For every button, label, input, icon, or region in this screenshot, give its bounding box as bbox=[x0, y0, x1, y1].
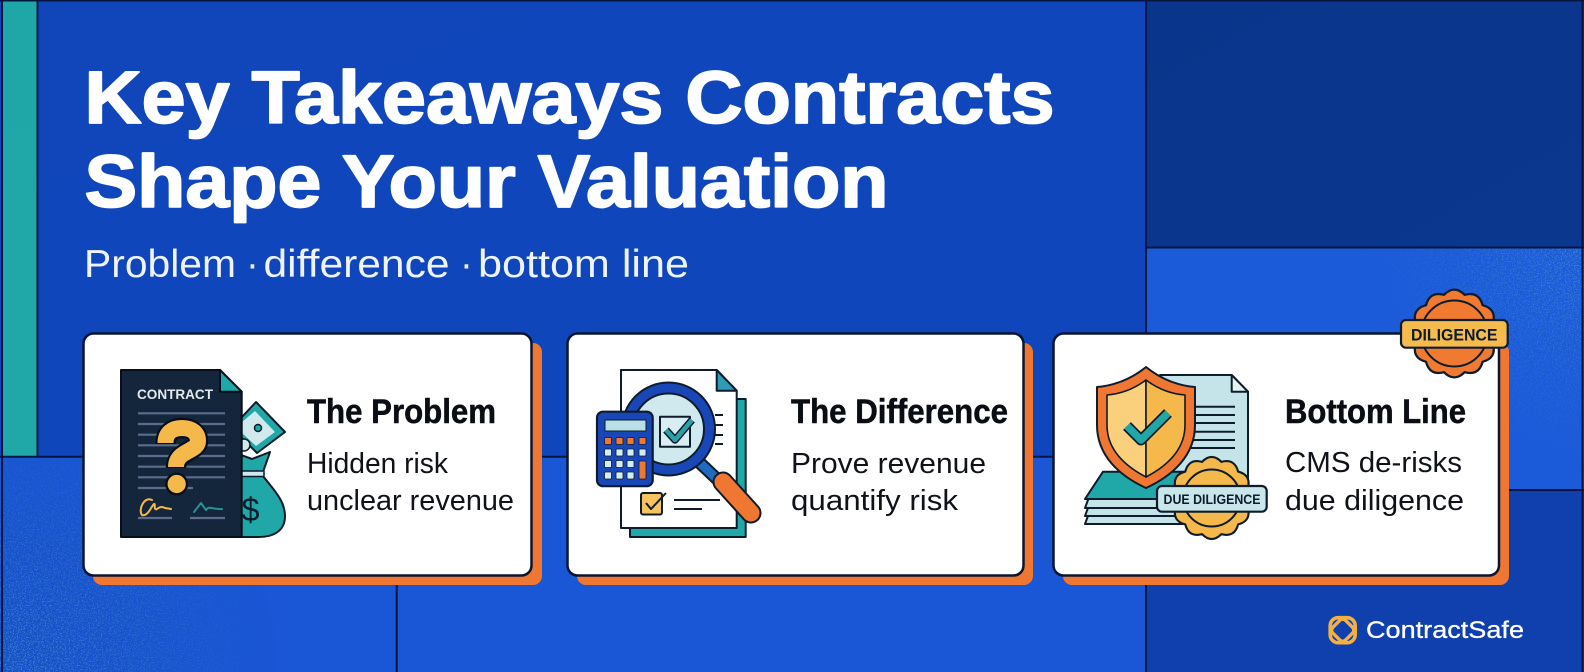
card 1 body text: Hidden risk bbox=[307, 448, 448, 480]
logo mark bbox=[1330, 617, 1355, 643]
background: middle right panel bbox=[1146, 247, 1584, 490]
card 3 heading: Bottom Line bbox=[1285, 393, 1466, 431]
subtitle: Problem bbox=[84, 243, 236, 286]
card 3 body text: due diligence bbox=[1285, 485, 1464, 517]
background: top right dark panel bbox=[1146, 0, 1584, 247]
icon: calculator, magnifier and document bbox=[597, 370, 751, 537]
title: Shape Your Valuation bbox=[84, 140, 888, 223]
background: bottom right panel bbox=[1146, 490, 1584, 672]
logo wordmark: ContractSafe bbox=[1366, 617, 1524, 644]
card 3 orange shadow bbox=[1063, 343, 1509, 585]
panel: the problem bbox=[84, 334, 542, 585]
document bbox=[1160, 375, 1248, 497]
contract label: CONTRACT bbox=[137, 387, 214, 402]
icon: shield, document and seal bbox=[1085, 367, 1267, 539]
signatures bbox=[141, 499, 222, 515]
background: teal accent stripe bbox=[3, 0, 37, 457]
card 2 body bbox=[568, 334, 1024, 576]
panel: the difference bbox=[568, 334, 1033, 585]
magnifier bbox=[628, 388, 751, 513]
badge: diligence: DILIGENCE bbox=[1411, 326, 1498, 345]
subtitle bbox=[84, 243, 689, 286]
card 2 body text: Prove revenue bbox=[791, 448, 986, 480]
due diligence seal bbox=[1157, 457, 1267, 539]
card 3 body text: CMS de-risks bbox=[1285, 447, 1462, 479]
card 1 orange shadow bbox=[93, 343, 542, 585]
money bill bbox=[238, 402, 285, 453]
paper stack bbox=[1085, 472, 1190, 524]
card 2 heading: The Difference bbox=[791, 393, 1008, 431]
title bbox=[84, 56, 1054, 223]
shield bbox=[1097, 367, 1195, 488]
card 1 body text: unclear revenue bbox=[307, 485, 514, 517]
back sheet bbox=[630, 399, 746, 537]
contract document bbox=[121, 370, 242, 537]
logo: contractsafe bbox=[1330, 617, 1524, 644]
calculator bbox=[597, 412, 653, 486]
subtitle: difference bbox=[264, 243, 450, 286]
card 1 body text bbox=[307, 448, 514, 517]
card 2 orange shadow bbox=[577, 343, 1033, 585]
card 1 body bbox=[84, 334, 532, 576]
subtitle: · bbox=[460, 243, 473, 286]
card 2 body text: quantify risk bbox=[791, 485, 959, 517]
card 2 body text bbox=[791, 448, 986, 517]
badge: diligence bbox=[1401, 290, 1508, 377]
background: bottom middle panel bbox=[397, 457, 1146, 672]
card 3 body text bbox=[1285, 447, 1464, 517]
background: bottom left panel bbox=[0, 457, 397, 672]
icon: contract and money bag bbox=[121, 370, 285, 537]
title: Key Takeaways Contracts bbox=[84, 56, 1054, 139]
background: main blue panel bbox=[38, 0, 1146, 457]
card 3 body bbox=[1054, 334, 1499, 576]
question mark bbox=[166, 428, 198, 494]
front paper bbox=[621, 370, 737, 528]
document fold bbox=[220, 370, 242, 392]
subtitle: · bbox=[246, 243, 259, 286]
due diligence seal: DUE DILIGENCE bbox=[1164, 491, 1260, 507]
card 1 heading: The Problem bbox=[307, 393, 496, 431]
panel: bottom line bbox=[1054, 290, 1509, 585]
money bag bbox=[241, 452, 285, 537]
yellow checkbox bbox=[641, 493, 666, 514]
money bag: $ bbox=[242, 491, 260, 528]
subtitle: bottom line bbox=[478, 243, 689, 286]
